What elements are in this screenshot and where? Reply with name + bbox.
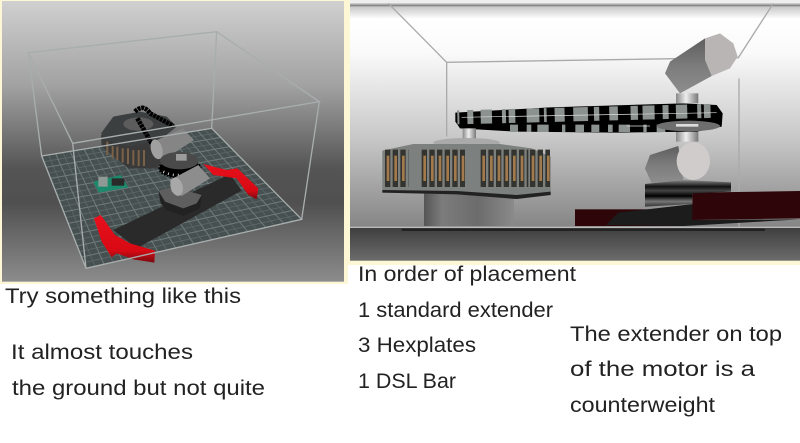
panel: side 3D view of the robot bbox=[348, 0, 800, 265]
red wheel rear bbox=[203, 164, 258, 199]
hex plates bbox=[158, 187, 202, 216]
small gear bbox=[159, 152, 201, 178]
large belt gear bbox=[455, 103, 723, 133]
red wheel front bbox=[94, 215, 155, 263]
lower cylinder bbox=[168, 165, 210, 197]
text: note line 2: the ground but not quite bbox=[12, 377, 265, 400]
text: placement item 3: 1 DSL Bar bbox=[358, 370, 456, 393]
wireframe box bbox=[28, 32, 319, 268]
text: counterweight line 2: of the motor is a bbox=[570, 358, 755, 381]
text: placement item 1: 1 standard extender bbox=[358, 299, 553, 322]
text: placement item 2: 3 Hexplates bbox=[358, 334, 476, 357]
panel: angled 3D view of the robot bbox=[0, 0, 348, 284]
hex plates stack bbox=[645, 180, 731, 207]
text: placement heading: In order of placement bbox=[358, 263, 576, 286]
text: counterweight line 1: The extender on top bbox=[570, 323, 782, 346]
dark red bar and wheels bbox=[575, 191, 800, 226]
wireframe box bbox=[388, 3, 773, 227]
axle lower bbox=[676, 125, 698, 142]
text: counterweight line 3: counterweight bbox=[570, 394, 715, 417]
circuit board bbox=[93, 175, 128, 193]
text: note line 1: It almost touches bbox=[11, 341, 193, 364]
top cylinder bbox=[665, 33, 738, 93]
gear belt bbox=[135, 108, 173, 143]
large gear with column bbox=[382, 128, 551, 226]
floor grid bbox=[42, 128, 302, 268]
large gear bbox=[101, 112, 177, 168]
axle upper bbox=[676, 93, 698, 103]
lower cylinder bbox=[645, 142, 710, 183]
top cylinder bbox=[149, 128, 194, 160]
text: caption left: Try something like this bbox=[5, 285, 241, 308]
black bar bbox=[113, 174, 242, 248]
